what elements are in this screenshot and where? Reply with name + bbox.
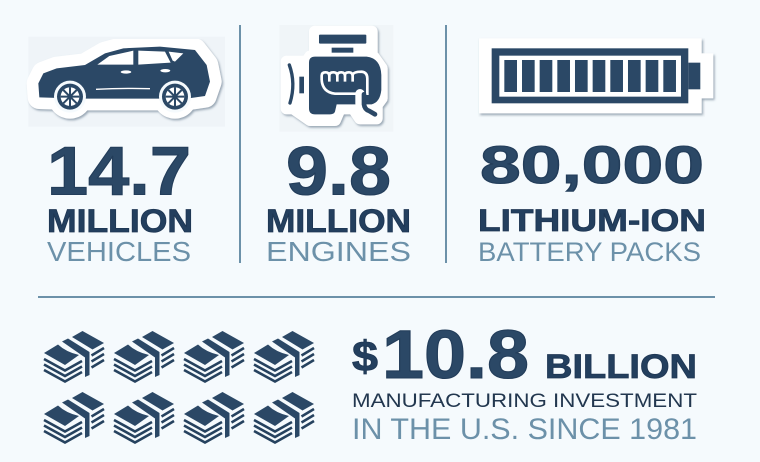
text: in the U.S. since 1981: IN THE U.S. SINCE 1981 — [352, 413, 697, 446]
stat: 80,000: 80,000 — [480, 136, 704, 195]
stat: 9.8: 9.8 — [286, 132, 391, 210]
panel: battery packs — [478, 38, 713, 267]
icon: engine — [279, 25, 393, 132]
divider: horizontal — [38, 296, 715, 298]
icon: stacks of money — [44, 331, 314, 442]
label: lithium-ion: LITHIUM-ION — [478, 202, 706, 238]
stat: 10.8: 10.8 — [382, 316, 529, 393]
label: engines: ENGINES — [266, 236, 411, 267]
stat: 14.7: 14.7 — [47, 132, 191, 210]
label: million: MILLION — [266, 203, 411, 239]
panel: investment — [44, 316, 697, 446]
panel: engines — [266, 25, 411, 267]
label: battery packs: BATTERY PACKS — [478, 237, 701, 267]
panel: vehicles — [28, 37, 225, 267]
icon: battery — [478, 38, 713, 117]
stat: $: $ — [352, 333, 378, 381]
divider: right — [445, 25, 447, 263]
divider: left — [239, 25, 241, 263]
label: vehicles: VEHICLES — [47, 236, 191, 267]
stat: billion: BILLION — [545, 348, 697, 386]
label: million: MILLION — [47, 203, 193, 239]
icon: car — [28, 37, 225, 127]
text: manufacturing investment: MANUFACTURING INVESTMENT — [352, 390, 697, 412]
